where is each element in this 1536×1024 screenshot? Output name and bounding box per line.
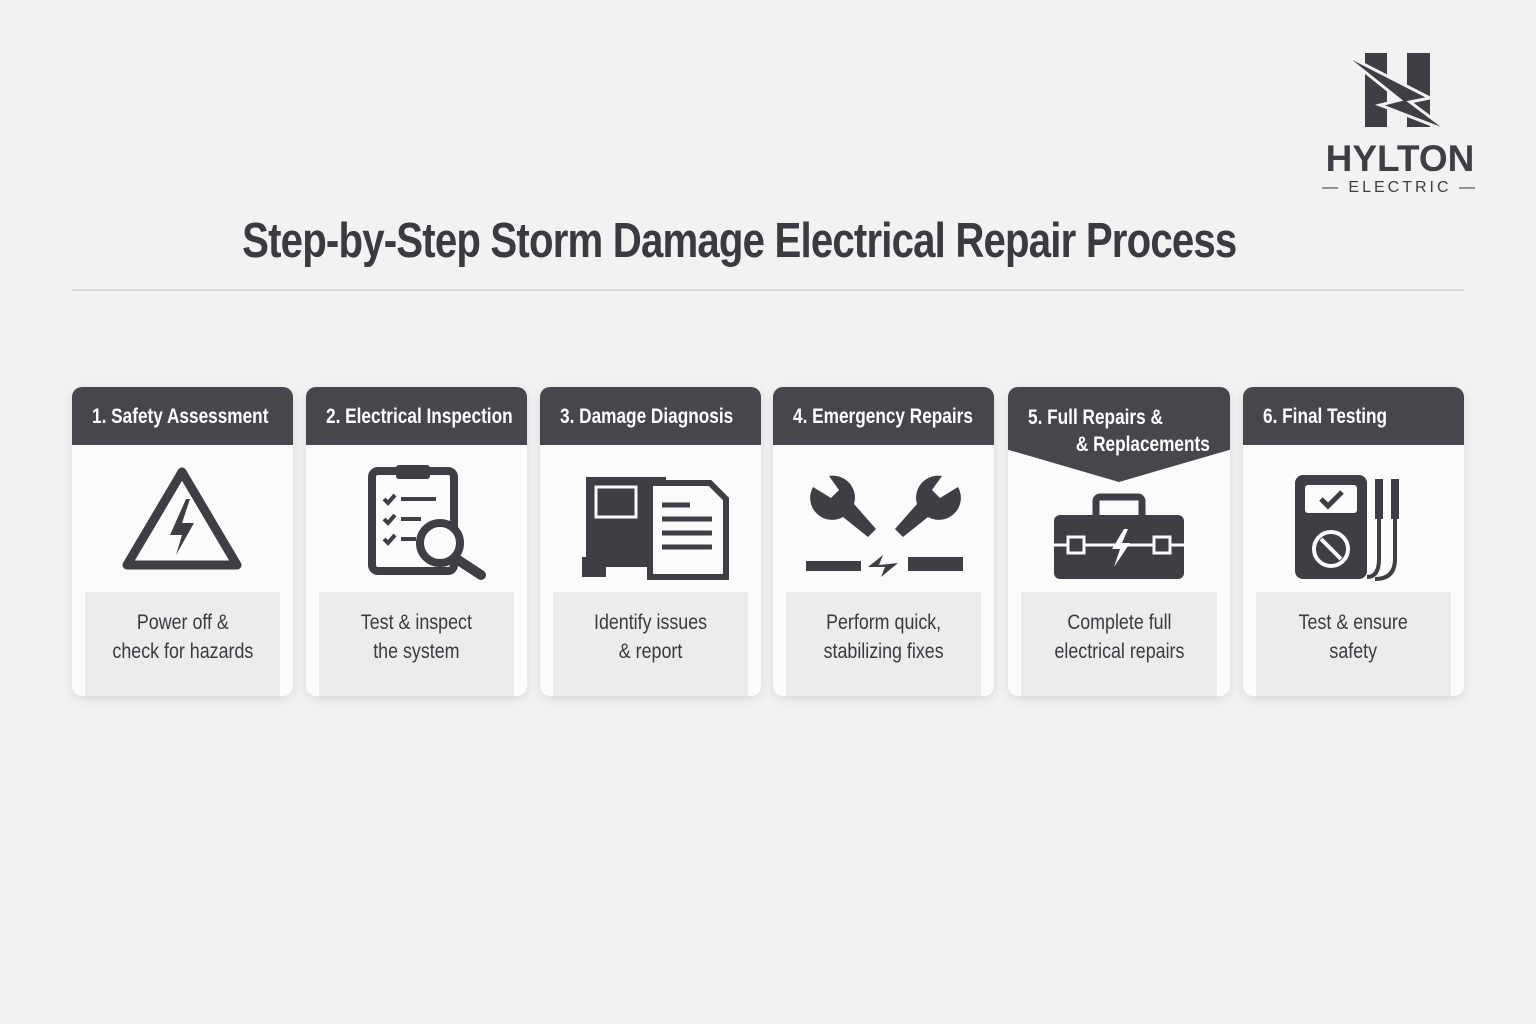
card 5: Complete full: [1067, 611, 1171, 634]
card 2: the system: [373, 640, 460, 663]
card 4: 4. Emergency Repairs: [793, 405, 973, 428]
card 1: [72, 387, 293, 696]
card 6: 6. Final Testing: [1263, 405, 1387, 428]
card 5: 5. Full Repairs &: [1028, 406, 1163, 429]
card 1: Power off &: [137, 611, 228, 634]
card 6: safety: [1330, 640, 1377, 663]
card 4: Perform quick,: [826, 611, 941, 634]
card 5: [1008, 387, 1230, 696]
card 1: check for hazards: [112, 640, 253, 663]
card 3: [540, 387, 761, 696]
icon: multimeter: [1295, 475, 1399, 581]
card 3: & report: [619, 640, 682, 663]
card 3: 3. Damage Diagnosis: [560, 405, 733, 428]
card 6: Test & ensure: [1299, 611, 1408, 634]
card 1: 1. Safety Assessment: [92, 405, 268, 428]
title: Step-by-Step Storm Damage Electrical Repair Process: [242, 214, 1236, 268]
icon: wrenches and wire: [806, 476, 963, 577]
logo: — ELECTRIC —: [1322, 179, 1478, 196]
icon: warning: [122, 468, 242, 570]
card 2: Test & inspect: [361, 611, 472, 634]
card 5: electrical repairs: [1054, 640, 1184, 663]
card 6: [1243, 387, 1464, 696]
card 4: stabilizing fixes: [823, 640, 944, 663]
logo: HYLTON: [1326, 138, 1474, 179]
icon: panel and report: [582, 477, 729, 580]
logo: [1322, 53, 1478, 196]
icon: clipboard magnifier: [368, 465, 486, 580]
card 5: & Replacements: [1076, 433, 1210, 456]
card 4: [773, 387, 994, 696]
card 3: Identify issues: [594, 611, 707, 634]
icon: toolbox: [1054, 494, 1184, 579]
card 2: [306, 387, 527, 696]
card 2: 2. Electrical Inspection: [326, 405, 513, 428]
